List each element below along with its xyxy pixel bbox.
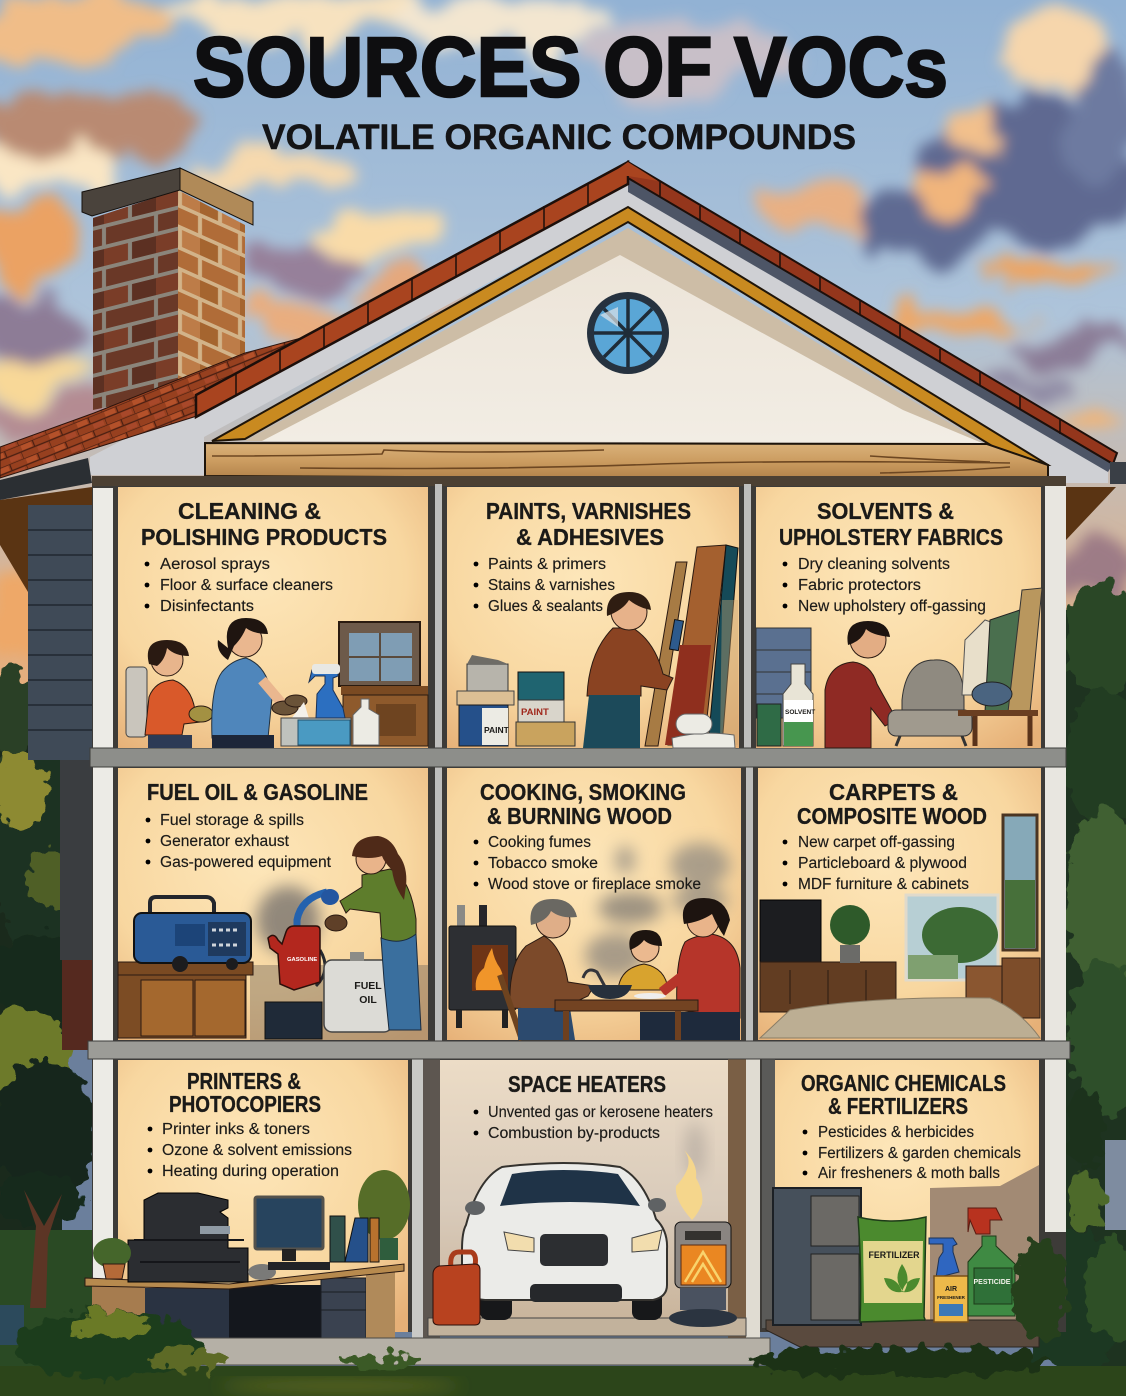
list: [803, 1124, 1021, 1182]
list: New carpet off-gassing: [798, 834, 955, 851]
chimney: [82, 168, 253, 410]
subtitle: VOLATILE ORGANIC COMPOUNDS: [262, 118, 856, 157]
list: Air fresheners & moth balls: [818, 1165, 1000, 1182]
illustration: shaded wall: [930, 1165, 1039, 1320]
illustration: wood stove: [449, 905, 516, 1028]
heading: [779, 498, 1003, 550]
illustration: person cleaning: [825, 621, 897, 748]
illustration: windows: [906, 815, 1037, 980]
heading: FUEL OIL & GASOLINE: [147, 779, 368, 805]
heading: [486, 498, 691, 550]
illustration: paint cans: [457, 655, 575, 746]
illustration: exhaust cloud: [256, 886, 320, 954]
heading: CLEANING &: [178, 498, 321, 524]
heading: [480, 779, 686, 829]
background trees right: [1010, 580, 1126, 1370]
illustration: table and family: [500, 898, 740, 1040]
panel: paints, varnishes and adhesives: [447, 487, 739, 748]
title: SOURCES OF VOCs: [193, 20, 948, 114]
illustration: carpet: [760, 998, 1040, 1038]
illustration: woman cleaning: [212, 618, 307, 748]
heading: [169, 1068, 321, 1117]
heading: UPHOLSTERY FABRICS: [779, 524, 1003, 550]
illustration: window and cabinet: [339, 622, 428, 746]
attic round window: [587, 292, 669, 374]
list: [783, 834, 969, 893]
list: Combustion by-products: [488, 1125, 660, 1142]
list: [148, 1121, 352, 1180]
title: [193, 20, 948, 157]
illustration: fertilizer bag: FERTILIZER: [868, 1250, 920, 1261]
illustration: binders and plant: [93, 1170, 410, 1279]
list: Generator exhaust: [160, 833, 290, 850]
list: [474, 556, 615, 615]
panel: organic chemicals and fertilizers: [766, 1060, 1039, 1347]
list: Floor & surface cleaners: [160, 577, 333, 594]
list: Fuel storage & spills: [160, 812, 304, 829]
illustration: gas can: [433, 1252, 480, 1325]
list: [146, 812, 332, 871]
bushes and grass: [0, 1240, 1126, 1396]
illustration: air freshener: [929, 1238, 968, 1322]
illustration: desk: [85, 1264, 404, 1346]
wooden beam: [205, 443, 1048, 480]
list: [474, 834, 701, 893]
illustration: armchair and rolls: [888, 588, 1042, 746]
list: [145, 556, 333, 615]
list: Disinfectants: [160, 598, 254, 615]
illustration: fuel oil tank: FUEL: [354, 980, 382, 992]
heading: PHOTOCOPIERS: [169, 1091, 321, 1117]
illustration: child: [126, 640, 213, 748]
panel: carpets and composite wood: [758, 768, 1041, 1040]
heading: CARPETS &: [829, 779, 958, 805]
list: Tobacco smoke: [488, 855, 598, 872]
illustration: TV and console: [760, 900, 896, 1012]
list: Paints & primers: [488, 556, 606, 573]
gable fascia and wall: [90, 178, 1113, 483]
list: Aerosol sprays: [160, 556, 270, 573]
list: Ozone & solvent emissions: [162, 1142, 352, 1159]
panel: cooking, smoking and burning wood: [447, 768, 741, 1040]
illustration: wood planks: [645, 545, 738, 748]
list: Unvented gas or kerosene heaters: [488, 1104, 713, 1121]
illustration: white car: [462, 1163, 667, 1320]
list: New upholstery off-gassing: [798, 598, 986, 615]
illustration: lower wall: [250, 965, 428, 1040]
panel: printers and photocopiers: [85, 1060, 410, 1346]
illustration: fuel oil tank: OIL: [359, 994, 377, 1006]
illustration: shelves and bottles: [756, 628, 815, 746]
heading: PRINTERS &: [187, 1068, 301, 1094]
illustration: woman pouring: [321, 836, 421, 1030]
list: Fertilizers & garden chemicals: [818, 1145, 1021, 1162]
panel: cleaning and polishing products: [118, 487, 428, 748]
heading: SOLVENTS &: [817, 498, 954, 524]
list: Stains & varnishes: [488, 577, 615, 594]
heading: [797, 779, 987, 829]
illustration: pesticide bottle: [968, 1208, 1015, 1316]
illustration: kerosene heater: [669, 1222, 737, 1327]
illustration: fuel oil tank: [324, 952, 392, 1032]
heading: COOKING, SMOKING: [480, 779, 686, 805]
heading: & ADHESIVES: [516, 524, 664, 550]
heading: [141, 498, 387, 550]
panel: solvents and upholstery fabrics: [756, 487, 1042, 748]
illustration: generator on cabinet: [118, 897, 253, 1038]
left and right eaves with siding: [0, 458, 1126, 760]
illustration: spray bottles: [281, 664, 379, 746]
list: [474, 1104, 713, 1142]
illustration: pesticide bottle: PESTICIDE: [974, 1279, 1011, 1286]
heading: [801, 1070, 1006, 1119]
illustration: paint cans: PAINT: [521, 707, 549, 718]
list: Heating during operation: [162, 1163, 339, 1180]
illustration: garage floor: [428, 1318, 746, 1336]
list: Dry cleaning solvents: [798, 556, 950, 573]
house frame: [88, 476, 1070, 1338]
panel: space heaters: [428, 1060, 746, 1336]
illustration: gasoline can: GASOLINE: [287, 957, 317, 963]
panel: fuel oil and gasoline: [118, 768, 428, 1040]
illustration: smoke and flame plume: [676, 1122, 705, 1220]
heading: SPACE HEATERS: [508, 1071, 666, 1097]
illustration: platform and metal cabinet: [766, 1188, 1039, 1347]
illustration: side cabinet: [966, 958, 1040, 1018]
illustration: air freshener: AIR: [945, 1286, 957, 1293]
heading: ORGANIC CHEMICALS: [801, 1070, 1006, 1096]
illustration: gasoline can: [265, 892, 327, 1039]
foundation: [190, 1338, 770, 1365]
heading: & BURNING WOOD: [487, 803, 672, 829]
illustration: computer monitor: [255, 1197, 330, 1270]
list: Printer inks & toners: [162, 1121, 310, 1138]
illustration: smoke: [585, 843, 730, 977]
background trees left: [0, 665, 97, 1370]
list: Particleboard & plywood: [798, 855, 967, 872]
list: [783, 556, 986, 615]
illustration: paint cans: PAINT: [484, 725, 510, 735]
roof: [0, 162, 1117, 478]
illustration: painter: [583, 592, 673, 748]
list: Pesticides & herbicides: [818, 1124, 974, 1141]
list: Gas-powered equipment: [160, 854, 332, 871]
list: Wood stove or fireplace smoke: [488, 876, 701, 893]
list: MDF furniture & cabinets: [798, 876, 969, 893]
illustration: shelves and bottles: SOLVENT: [785, 709, 815, 716]
heading: COMPOSITE WOOD: [797, 803, 987, 829]
list: Cooking fumes: [488, 834, 591, 851]
sky background: [0, 0, 1126, 700]
illustration: air freshener: FRESHENER: [937, 1295, 966, 1300]
list: Fabric protectors: [798, 577, 921, 594]
list: Glues & sealants: [488, 598, 603, 615]
heading: POLISHING PRODUCTS: [141, 524, 387, 550]
illustration: fertilizer bag: [858, 1217, 926, 1322]
illustration: printer: [128, 1193, 276, 1282]
heading: & FERTILIZERS: [828, 1093, 968, 1119]
heading: PAINTS, VARNISHES: [486, 498, 691, 524]
